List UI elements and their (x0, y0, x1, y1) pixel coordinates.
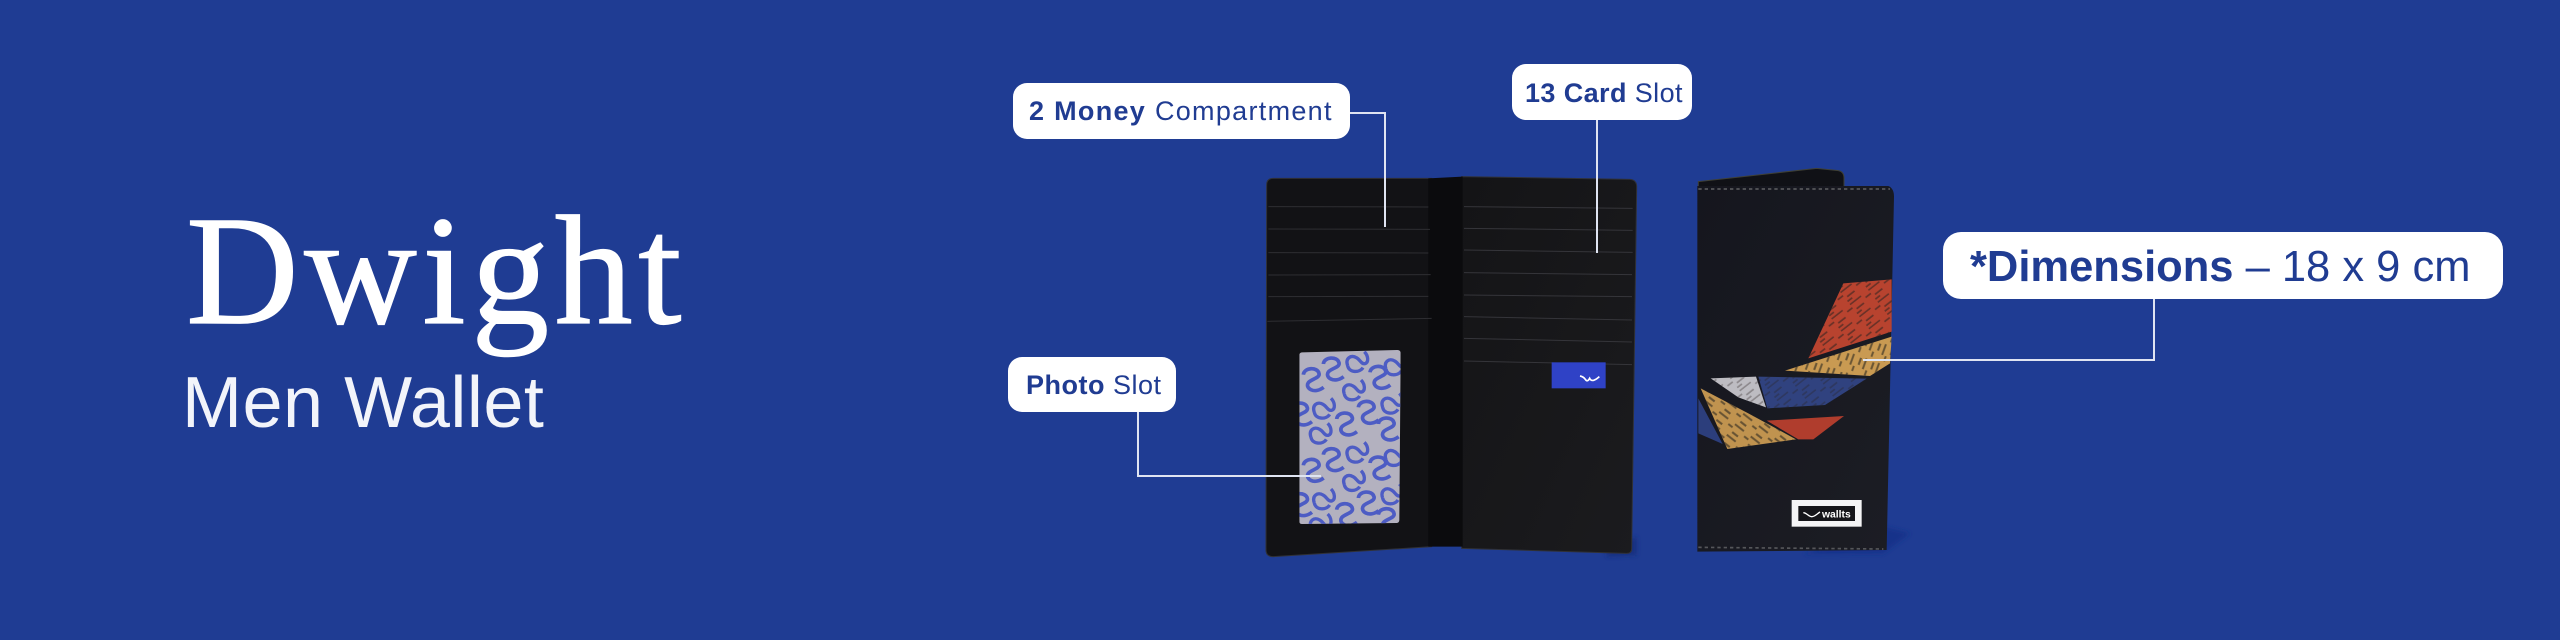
spine (1428, 177, 1463, 547)
photo window (1299, 350, 1401, 524)
callout: Photo Slot: Photo Slot (1026, 370, 1162, 400)
leader: money compartment (1350, 113, 1385, 227)
leader: dimensions (1863, 299, 2154, 360)
callout: 13 Card Slot (1512, 64, 1692, 120)
callout: dimensions: *Dimensions – 18 x 9 cm (1970, 243, 2470, 291)
callout: dimensions (1943, 232, 2503, 299)
subtitle: Men Wallet (182, 363, 544, 443)
wallet shadow (1803, 527, 1910, 554)
leader lines (1138, 113, 2154, 476)
leader: photo slot (1138, 412, 1321, 476)
front cover (1697, 186, 1894, 552)
back flap (1698, 168, 1844, 187)
left card slots (1267, 207, 1432, 321)
embroidered artwork (1698, 279, 1892, 449)
woven brand tag (1552, 362, 1606, 388)
walts label (1792, 500, 1862, 527)
callout: 2 Money Compartment (1013, 83, 1350, 139)
leader: card slot (1596, 120, 1598, 253)
right card slots (1464, 207, 1633, 365)
right panel (1462, 177, 1637, 553)
title: Dwight (186, 184, 687, 357)
callout: Photo Slot (1008, 357, 1176, 412)
left panel (1266, 178, 1432, 557)
callout: 2 Money Compartment: 2 Money Compartment (1029, 96, 1333, 126)
open wallet (1266, 177, 1637, 557)
walts label: wallts (1821, 509, 1851, 520)
wallet shadow (1607, 537, 1637, 557)
closed wallet (1697, 168, 1910, 554)
callout: 13 Card Slot: 13 Card Slot (1525, 78, 1683, 108)
stitching (1698, 189, 1890, 549)
